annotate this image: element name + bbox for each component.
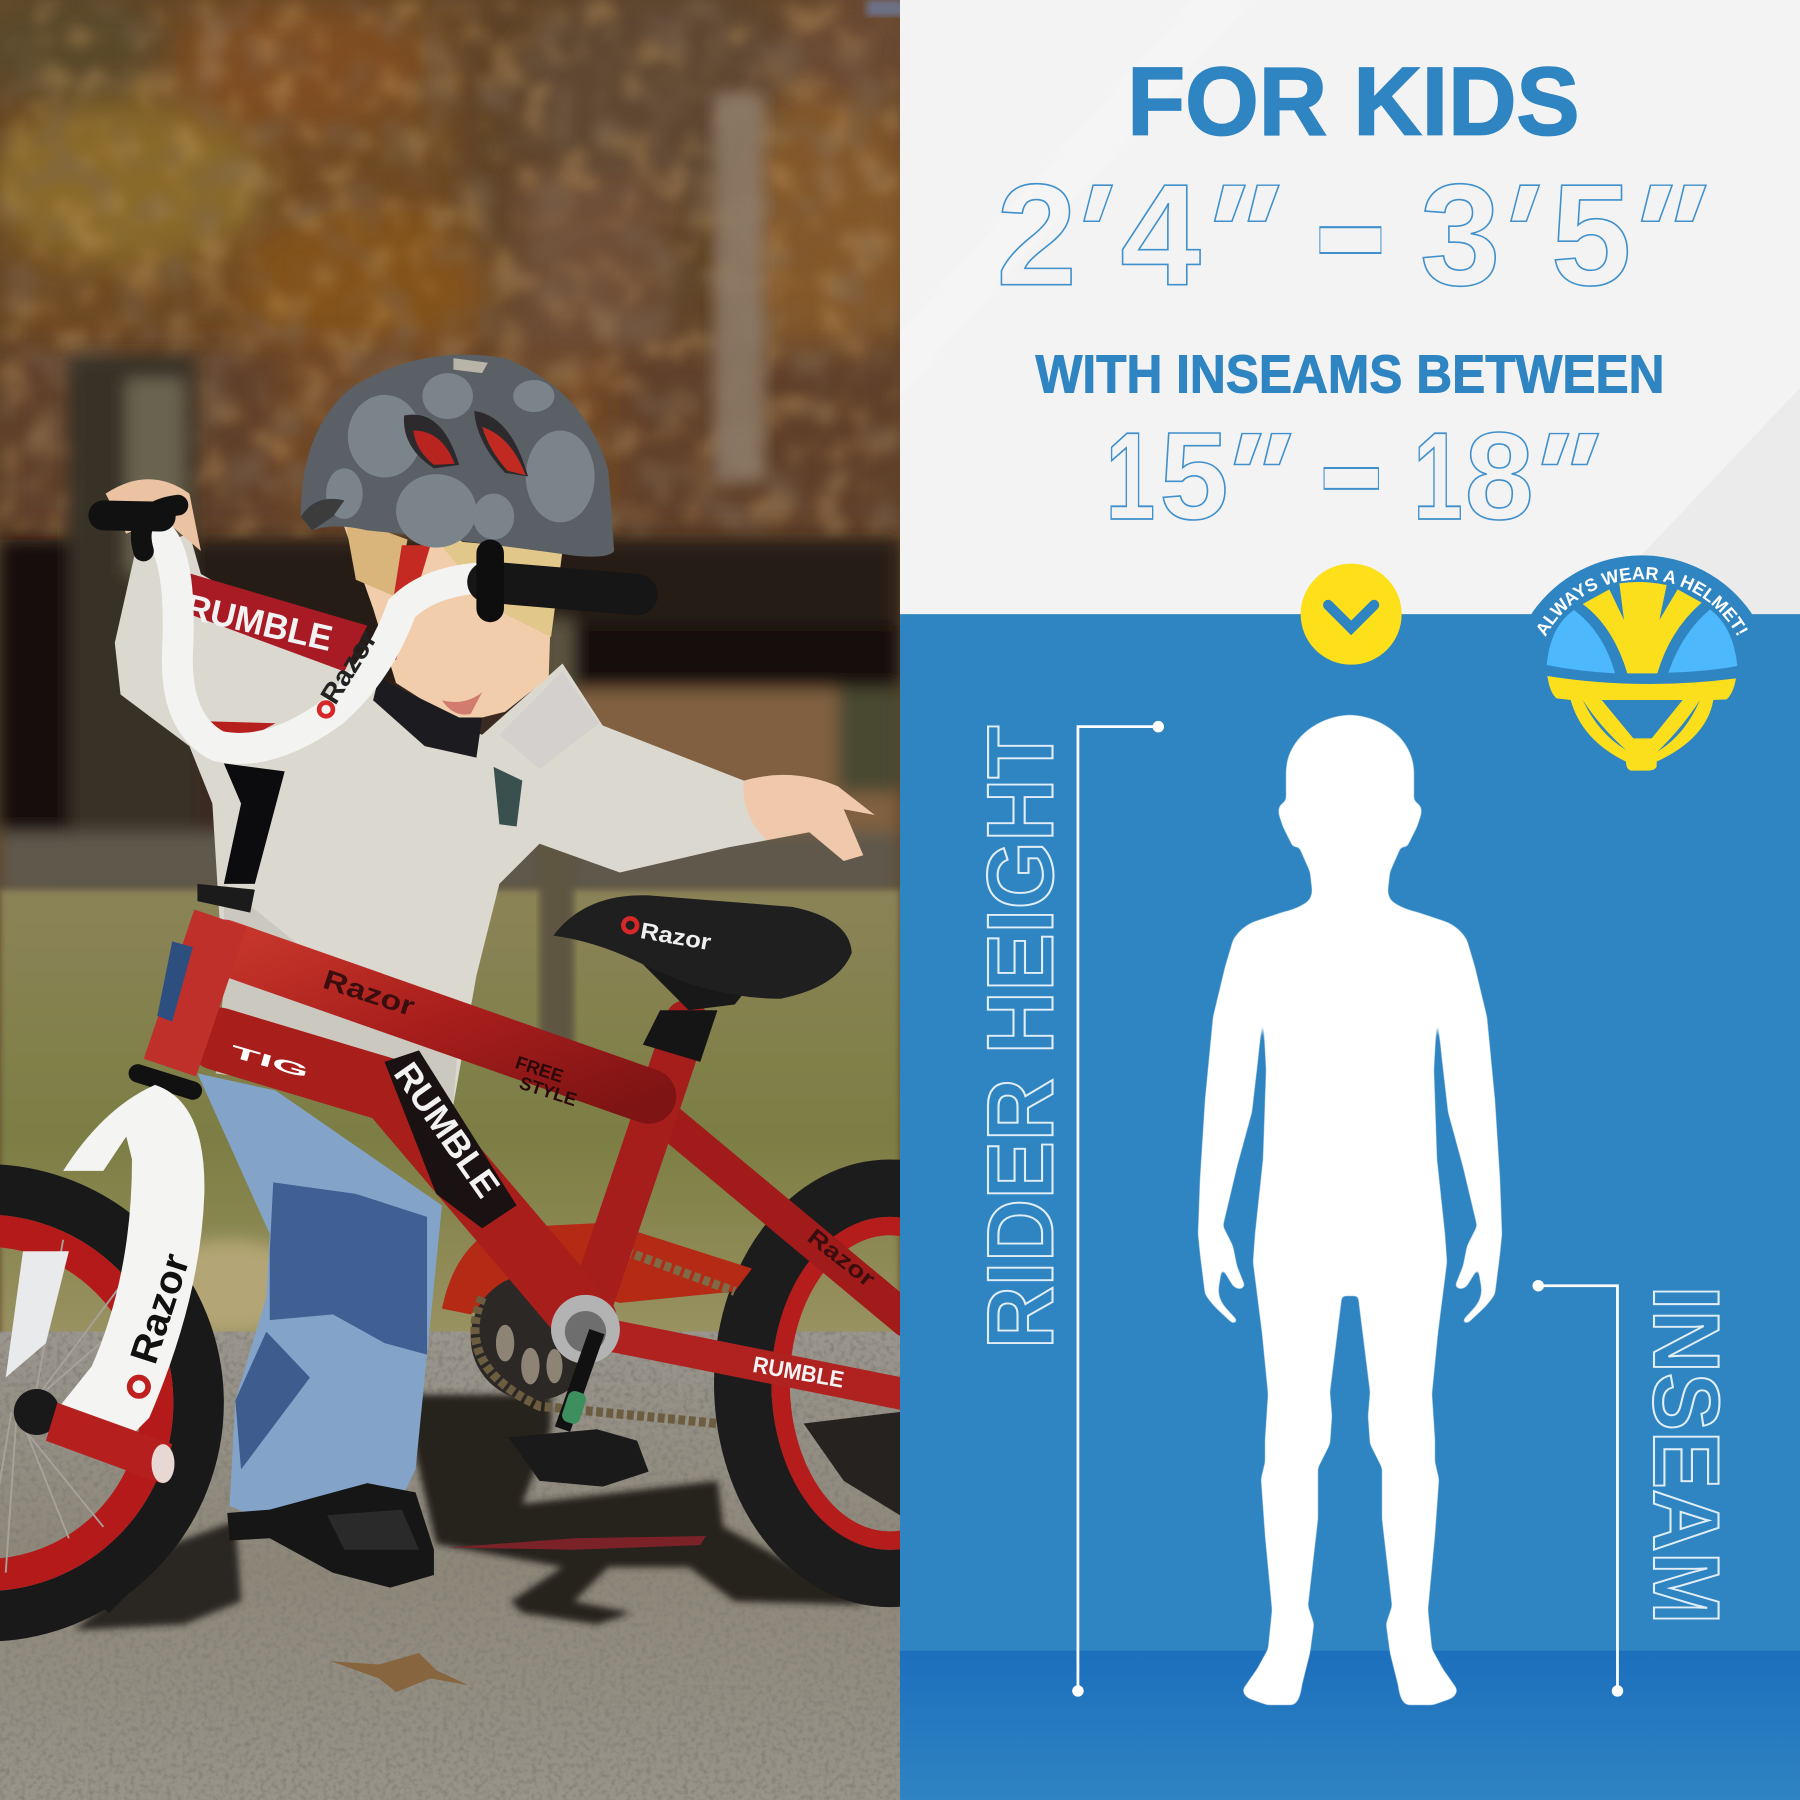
label: RIDER HEIGHT: RIDER HEIGHT <box>968 726 1073 1349</box>
inseam range: 15" - 18": " <box>1198 407 1308 545</box>
panel: blue figure area <box>900 614 1800 1800</box>
rider height range: 2'4" - 3'5": ' <box>1472 155 1556 316</box>
photo: red bike frame <box>138 918 907 1395</box>
rider height range: 2'4" - 3'5": 4 <box>1120 154 1201 316</box>
photo: white handlebar <box>149 528 488 748</box>
photo: rear wheel <box>714 1160 900 1608</box>
label: Razor on top tube: Razor <box>320 963 419 1022</box>
label: RUMBLE on chain stay: RUMBLE <box>751 1351 846 1393</box>
icon: helmet badge <box>1532 555 1752 771</box>
photo: stem and headset <box>193 721 285 913</box>
photo: grey skull helmet <box>301 355 614 557</box>
subheading: WITH INSEAMS BETWEEN: WITH INSEAMS BETWEEN <box>1035 345 1665 405</box>
label: FREE STYLE decal: STYLE <box>517 1072 580 1110</box>
rider height range: 2'4" - 3'5": 2 <box>996 154 1077 316</box>
inseam range: 15" - 18": 1 <box>1413 406 1463 545</box>
photo ground: asphalt with shadows <box>0 1332 900 1800</box>
badge backing dome <box>1532 555 1752 622</box>
photo: seat post and saddle <box>553 895 852 1062</box>
photo: handlebar pad <box>182 572 367 672</box>
photo: child head <box>339 511 562 758</box>
rider height range: 2'4" - 3'5": " <box>1173 155 1299 316</box>
rider height range: 2'4" - 3'5": – <box>1316 74 1385 365</box>
label: Razor on handlebar: Razor <box>314 624 383 709</box>
photo: child shoe <box>227 1483 434 1588</box>
label: TIG decal: TIG <box>228 1041 311 1082</box>
rider height range: 2'4" - 3'5": 3 <box>1420 154 1500 316</box>
photo: fallen leaf <box>331 1653 468 1692</box>
inseam range: 15" - 18": 1 <box>1105 406 1155 545</box>
helmet side vents <box>1547 609 1737 673</box>
photo: frame decals <box>228 963 880 1393</box>
floor band <box>900 1651 1800 1800</box>
label: RUMBLE on down tube: RUMBLE <box>386 1055 508 1205</box>
inseam range: 15" - 18": 5 <box>1159 408 1228 546</box>
inseam range: 15" - 18": " <box>1506 407 1616 545</box>
label: Razor on saddle: Razor <box>639 917 713 955</box>
rider height range: 2'4" - 3'5": " <box>1600 155 1726 316</box>
photo background: autumn trees and grass <box>0 0 900 1332</box>
label: FREE STYLE decal: FREE <box>513 1051 566 1087</box>
heading: FOR KIDS: FOR KIDS <box>1127 48 1580 155</box>
inseam bracket line <box>1533 1280 1623 1697</box>
photo: chainring and chain <box>442 1223 752 1423</box>
child silhouette <box>1198 715 1502 1705</box>
photo: child with red balance bike <box>0 0 900 1800</box>
panel: light header background <box>900 0 1800 615</box>
rider height range: 2'4" - 3'5" <box>996 74 1726 365</box>
inseam range: 15" - 18" <box>1105 344 1616 580</box>
photo: left hand <box>106 479 201 551</box>
photo: handlebar grips <box>103 505 637 608</box>
label: Razor on seat stay: Razor <box>803 1223 880 1292</box>
badge arc text: ALWAYS WEAR A HELMET! <box>1537 566 1748 637</box>
height bracket line <box>1072 721 1164 1697</box>
photo: right hand <box>743 775 875 861</box>
helmet yellow body <box>1547 582 1736 771</box>
inseam range: 15" - 18": – <box>1321 344 1382 580</box>
photo: child jeans <box>197 1073 442 1513</box>
label: Razor on fork: Razor <box>123 1249 198 1369</box>
inseam range: 15" - 18": 8 <box>1465 408 1534 546</box>
photo: child hoodie <box>115 534 767 1104</box>
rider height range: 2'4" - 3'5": 5 <box>1551 154 1631 316</box>
rider height range: 2'4" - 3'5": ' <box>1045 155 1129 316</box>
label: RUMBLE on pad: RUMBLE <box>182 586 336 659</box>
photo: bottom bracket, crank and pedal <box>509 1295 649 1487</box>
label: INSEAM: INSEAM <box>1634 1286 1739 1624</box>
photo: front wheel <box>0 1189 199 1616</box>
icon: yellow chevron button <box>1301 564 1402 665</box>
photo: white fork <box>6 1085 204 1483</box>
